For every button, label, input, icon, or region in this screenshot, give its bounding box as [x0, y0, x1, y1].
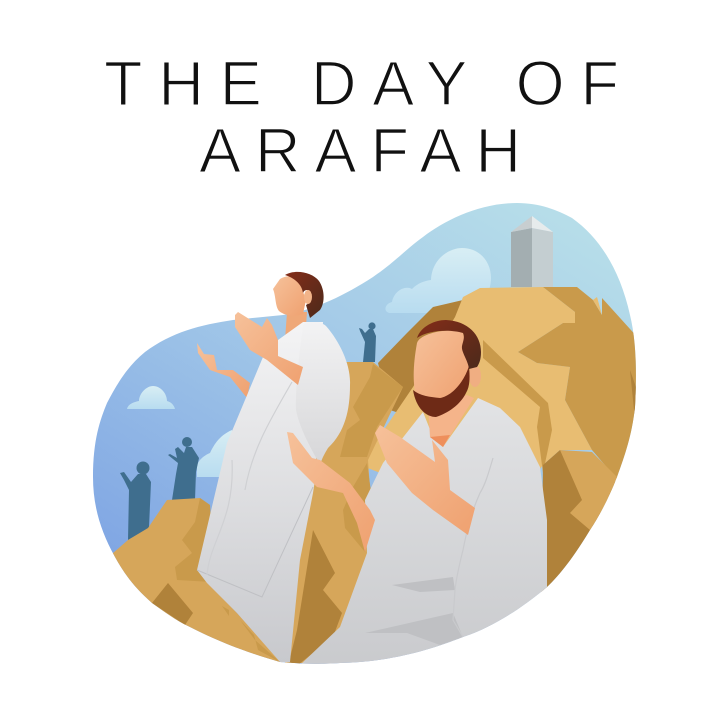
neck	[285, 312, 307, 340]
mountain: big right	[360, 287, 640, 600]
ear	[470, 366, 481, 387]
robe	[300, 398, 547, 670]
neck	[428, 395, 474, 447]
cloud: left	[127, 386, 175, 409]
beard	[413, 366, 470, 417]
far hand	[287, 432, 375, 552]
cloud: behind robe	[197, 430, 232, 477]
tower	[511, 216, 553, 287]
mountain: centre rock	[285, 362, 403, 665]
hair	[417, 320, 481, 369]
robe flap folds	[197, 487, 313, 597]
robe body	[197, 322, 323, 662]
title: THE DAY OF	[104, 49, 619, 119]
pilgrim: back figure	[197, 272, 350, 662]
hair	[285, 272, 324, 318]
silhouette: far pilgrim on rock	[359, 322, 376, 362]
title	[104, 49, 619, 186]
ear	[304, 290, 312, 304]
robe shoulder drape	[296, 322, 350, 465]
cloud: big	[385, 248, 491, 313]
infographic	[93, 62, 636, 664]
sky	[80, 190, 650, 670]
mountain: left rock	[100, 498, 285, 665]
far arm	[197, 343, 250, 398]
silhouette: second pilgrim	[168, 437, 199, 500]
title: ARAFAH	[199, 116, 521, 186]
face	[414, 331, 469, 402]
near hand	[375, 425, 475, 535]
illustration background	[80, 190, 650, 670]
head	[273, 276, 306, 316]
front figure layer	[287, 320, 547, 670]
pilgrim: front figure	[287, 320, 547, 670]
robe folds	[365, 577, 463, 645]
silhouette: far left pilgrim	[120, 462, 151, 540]
near arm and hand	[235, 312, 303, 385]
